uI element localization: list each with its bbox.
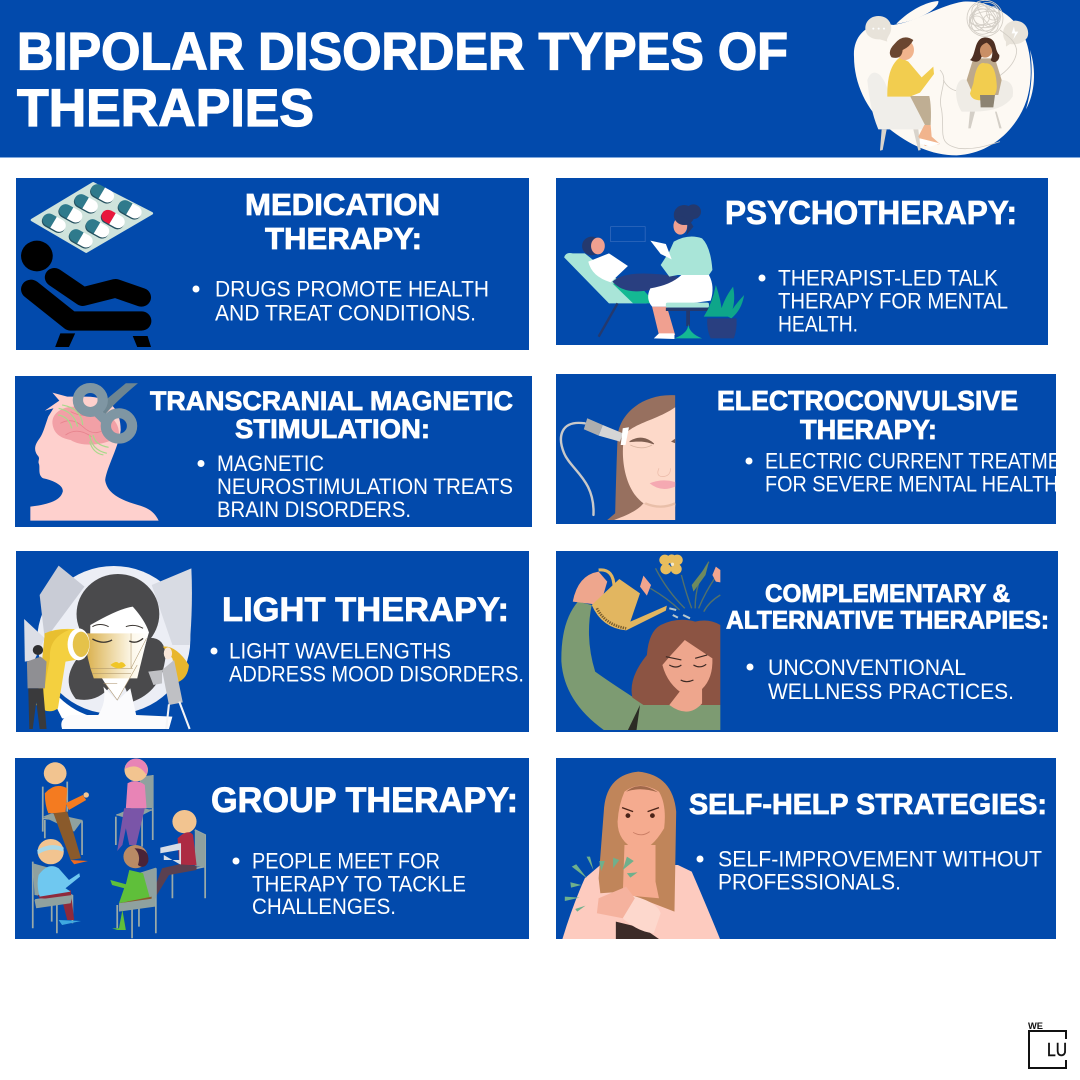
bullet text bbox=[696, 846, 1042, 894]
heading: ELECTROCONVULSIVE bbox=[717, 385, 1018, 416]
title: BIPOLAR DISORDER TYPES OF bbox=[17, 22, 788, 82]
heading bbox=[150, 386, 513, 444]
panel: psychotherapy bbox=[556, 178, 1048, 345]
bullet text bbox=[198, 451, 513, 522]
bullet text: PROFESSIONALS. bbox=[718, 869, 901, 894]
bullet text: CHALLENGES. bbox=[252, 894, 396, 919]
title: THERAPIES bbox=[17, 79, 314, 138]
bullet text: MAGNETIC bbox=[217, 451, 324, 476]
heading bbox=[717, 385, 1018, 445]
bullet text bbox=[746, 655, 1014, 704]
panel: group therapy bbox=[15, 758, 529, 939]
bullet text bbox=[192, 276, 489, 326]
illustration: woman watering flowers on head bbox=[561, 554, 720, 730]
heading: MEDICATION bbox=[245, 187, 440, 222]
bullet text: LIGHT WAVELENGTHS bbox=[229, 638, 451, 663]
heading: GROUP THERAPY: bbox=[211, 781, 518, 820]
heading bbox=[726, 580, 1049, 634]
illustration: therapy session bbox=[854, 0, 1034, 155]
icon: person reclining on couch bbox=[21, 241, 151, 347]
person: bottom centre, green shirt bbox=[110, 845, 156, 938]
heading: LIGHT THERAPY: bbox=[222, 591, 509, 629]
heading: SELF-HELP STRATEGIES: bbox=[689, 789, 1047, 821]
person: top centre, pink scarf bbox=[116, 759, 153, 851]
illustration: woman with hand on chest bbox=[562, 772, 720, 939]
bullet text: SELF-IMPROVEMENT WITHOUT bbox=[718, 846, 1042, 871]
bullet text: BRAIN DISORDERS. bbox=[217, 497, 411, 522]
person: bottom left, blue shirt bbox=[33, 839, 81, 933]
panel: transcranial magnetic stimulation bbox=[15, 376, 532, 527]
illustration: head with magnetic coil bbox=[30, 383, 159, 521]
bullet text: PEOPLE MEET FOR bbox=[252, 848, 440, 873]
bullet text bbox=[232, 848, 466, 919]
illustration: light device on face bbox=[24, 566, 192, 729]
panel: medication therapy bbox=[16, 178, 529, 350]
bullet text bbox=[210, 638, 524, 686]
logo: We Level Up: LU bbox=[1047, 1040, 1067, 1060]
heading: THERAPY: bbox=[800, 414, 937, 445]
bullet text: NEUROSTIMULATION TREATS bbox=[217, 474, 513, 499]
bullet text: AND TREAT CONDITIONS. bbox=[215, 300, 476, 326]
woman left bbox=[867, 73, 929, 129]
bullet text (clipped at panel edge) bbox=[746, 453, 1056, 492]
heading: STIMULATION: bbox=[235, 414, 430, 444]
bullet text: HEALTH. bbox=[778, 311, 858, 336]
panel: light therapy bbox=[16, 551, 529, 732]
woman right bbox=[956, 79, 1013, 112]
heading: TRANSCRANIAL MAGNETIC bbox=[150, 386, 513, 416]
bullet text: DRUGS PROMOTE HEALTH bbox=[215, 276, 489, 301]
header banner bbox=[0, 0, 1080, 158]
heading: ALTERNATIVE THERAPIES: bbox=[726, 606, 1049, 634]
person: top left, orange shirt bbox=[43, 762, 89, 864]
icon: pill blister pack bbox=[32, 182, 152, 252]
heading: THERAPY: bbox=[265, 221, 422, 256]
panel: complementary and alternative therapies bbox=[556, 551, 1058, 732]
illustration: people in a circle bbox=[33, 759, 205, 938]
bullet text: UNCONVENTIONAL bbox=[768, 655, 966, 680]
logo: We Level Up bbox=[1028, 1021, 1067, 1068]
bullet text: ADDRESS MOOD DISORDERS. bbox=[229, 661, 524, 686]
illustration: face with electrode bbox=[561, 395, 675, 520]
illustration: therapist and patient bbox=[564, 204, 744, 339]
heading: PSYCHOTHERAPY: bbox=[725, 194, 1017, 231]
bullet text: WELLNESS PRACTICES. bbox=[768, 679, 1014, 704]
bullet text: THERAPIST-LED TALK bbox=[778, 265, 998, 290]
bullet text: THERAPY TO TACKLE bbox=[252, 871, 466, 896]
bullet text bbox=[758, 265, 1008, 336]
heading bbox=[245, 187, 440, 256]
logo: We Level Up: WE bbox=[1028, 1021, 1043, 1032]
panel: electroconvulsive therapy bbox=[556, 374, 1080, 524]
title bbox=[17, 22, 788, 138]
person: right, red shirt bbox=[152, 810, 205, 898]
bullet text: THERAPY FOR MENTAL bbox=[778, 288, 1008, 313]
heading: COMPLEMENTARY & bbox=[765, 580, 1010, 608]
panel: self-help strategies bbox=[556, 758, 1056, 939]
